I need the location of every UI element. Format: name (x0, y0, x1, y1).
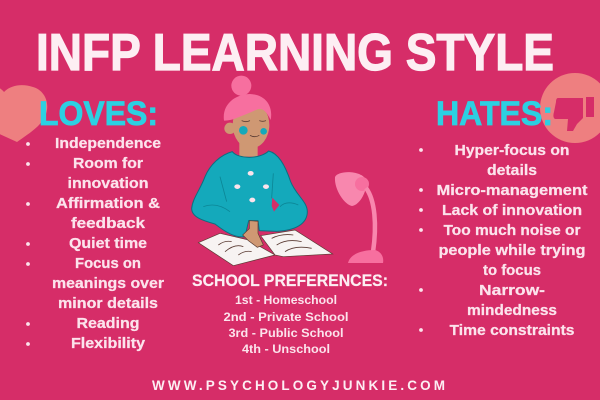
list: loves: Independence (55, 136, 161, 152)
list: loves: feedback (71, 216, 146, 232)
list: loves: Affirmation & (56, 196, 161, 212)
list: hates (419, 143, 588, 339)
icon: desk lamp (335, 172, 383, 263)
list: loves (26, 136, 164, 352)
heading: school preferences: SCHOOL PREFERENCES: (192, 271, 388, 290)
list: school preferences: 1st - Homeschool (235, 293, 337, 307)
heading: hates: HATES: (436, 95, 553, 133)
list: loves: innovation (68, 176, 148, 192)
list: school preferences: 4th - Unschool (242, 342, 330, 356)
list: hates: Too much noise or (444, 223, 581, 239)
list: hates: details (487, 163, 537, 179)
list: hates: Hyper-focus on (454, 143, 570, 159)
list: loves: Reading (76, 316, 140, 332)
list: loves: Quiet time (69, 236, 147, 252)
list: hates: mindedness (467, 303, 557, 319)
list: hates: Lack of innovation (442, 203, 582, 219)
list: school preferences: 3rd - Public School (228, 326, 344, 340)
list: hates: Narrow- (479, 283, 545, 299)
list: school preferences (224, 293, 348, 356)
footer url: WWW.PSYCHOLOGYJUNKIE.COM (152, 378, 445, 393)
icon: thumbs down badge (540, 73, 600, 143)
list: loves: Flexibility (71, 336, 145, 352)
list: loves: Room for (73, 156, 143, 172)
list: hates: to focus (483, 263, 541, 279)
list: hates: people while trying (438, 243, 586, 259)
list: school preferences: 2nd - Private School (224, 310, 348, 324)
list: hates: Time constraints (450, 323, 574, 339)
list: loves: meanings over (52, 276, 164, 292)
heading: loves: LOVES: (39, 95, 158, 133)
illustration: girl reading (192, 76, 333, 266)
icon: heart (0, 85, 47, 142)
list: loves: Focus on (75, 256, 141, 272)
list: hates: Micro-management (436, 183, 588, 199)
list: loves: minor details (58, 296, 158, 312)
